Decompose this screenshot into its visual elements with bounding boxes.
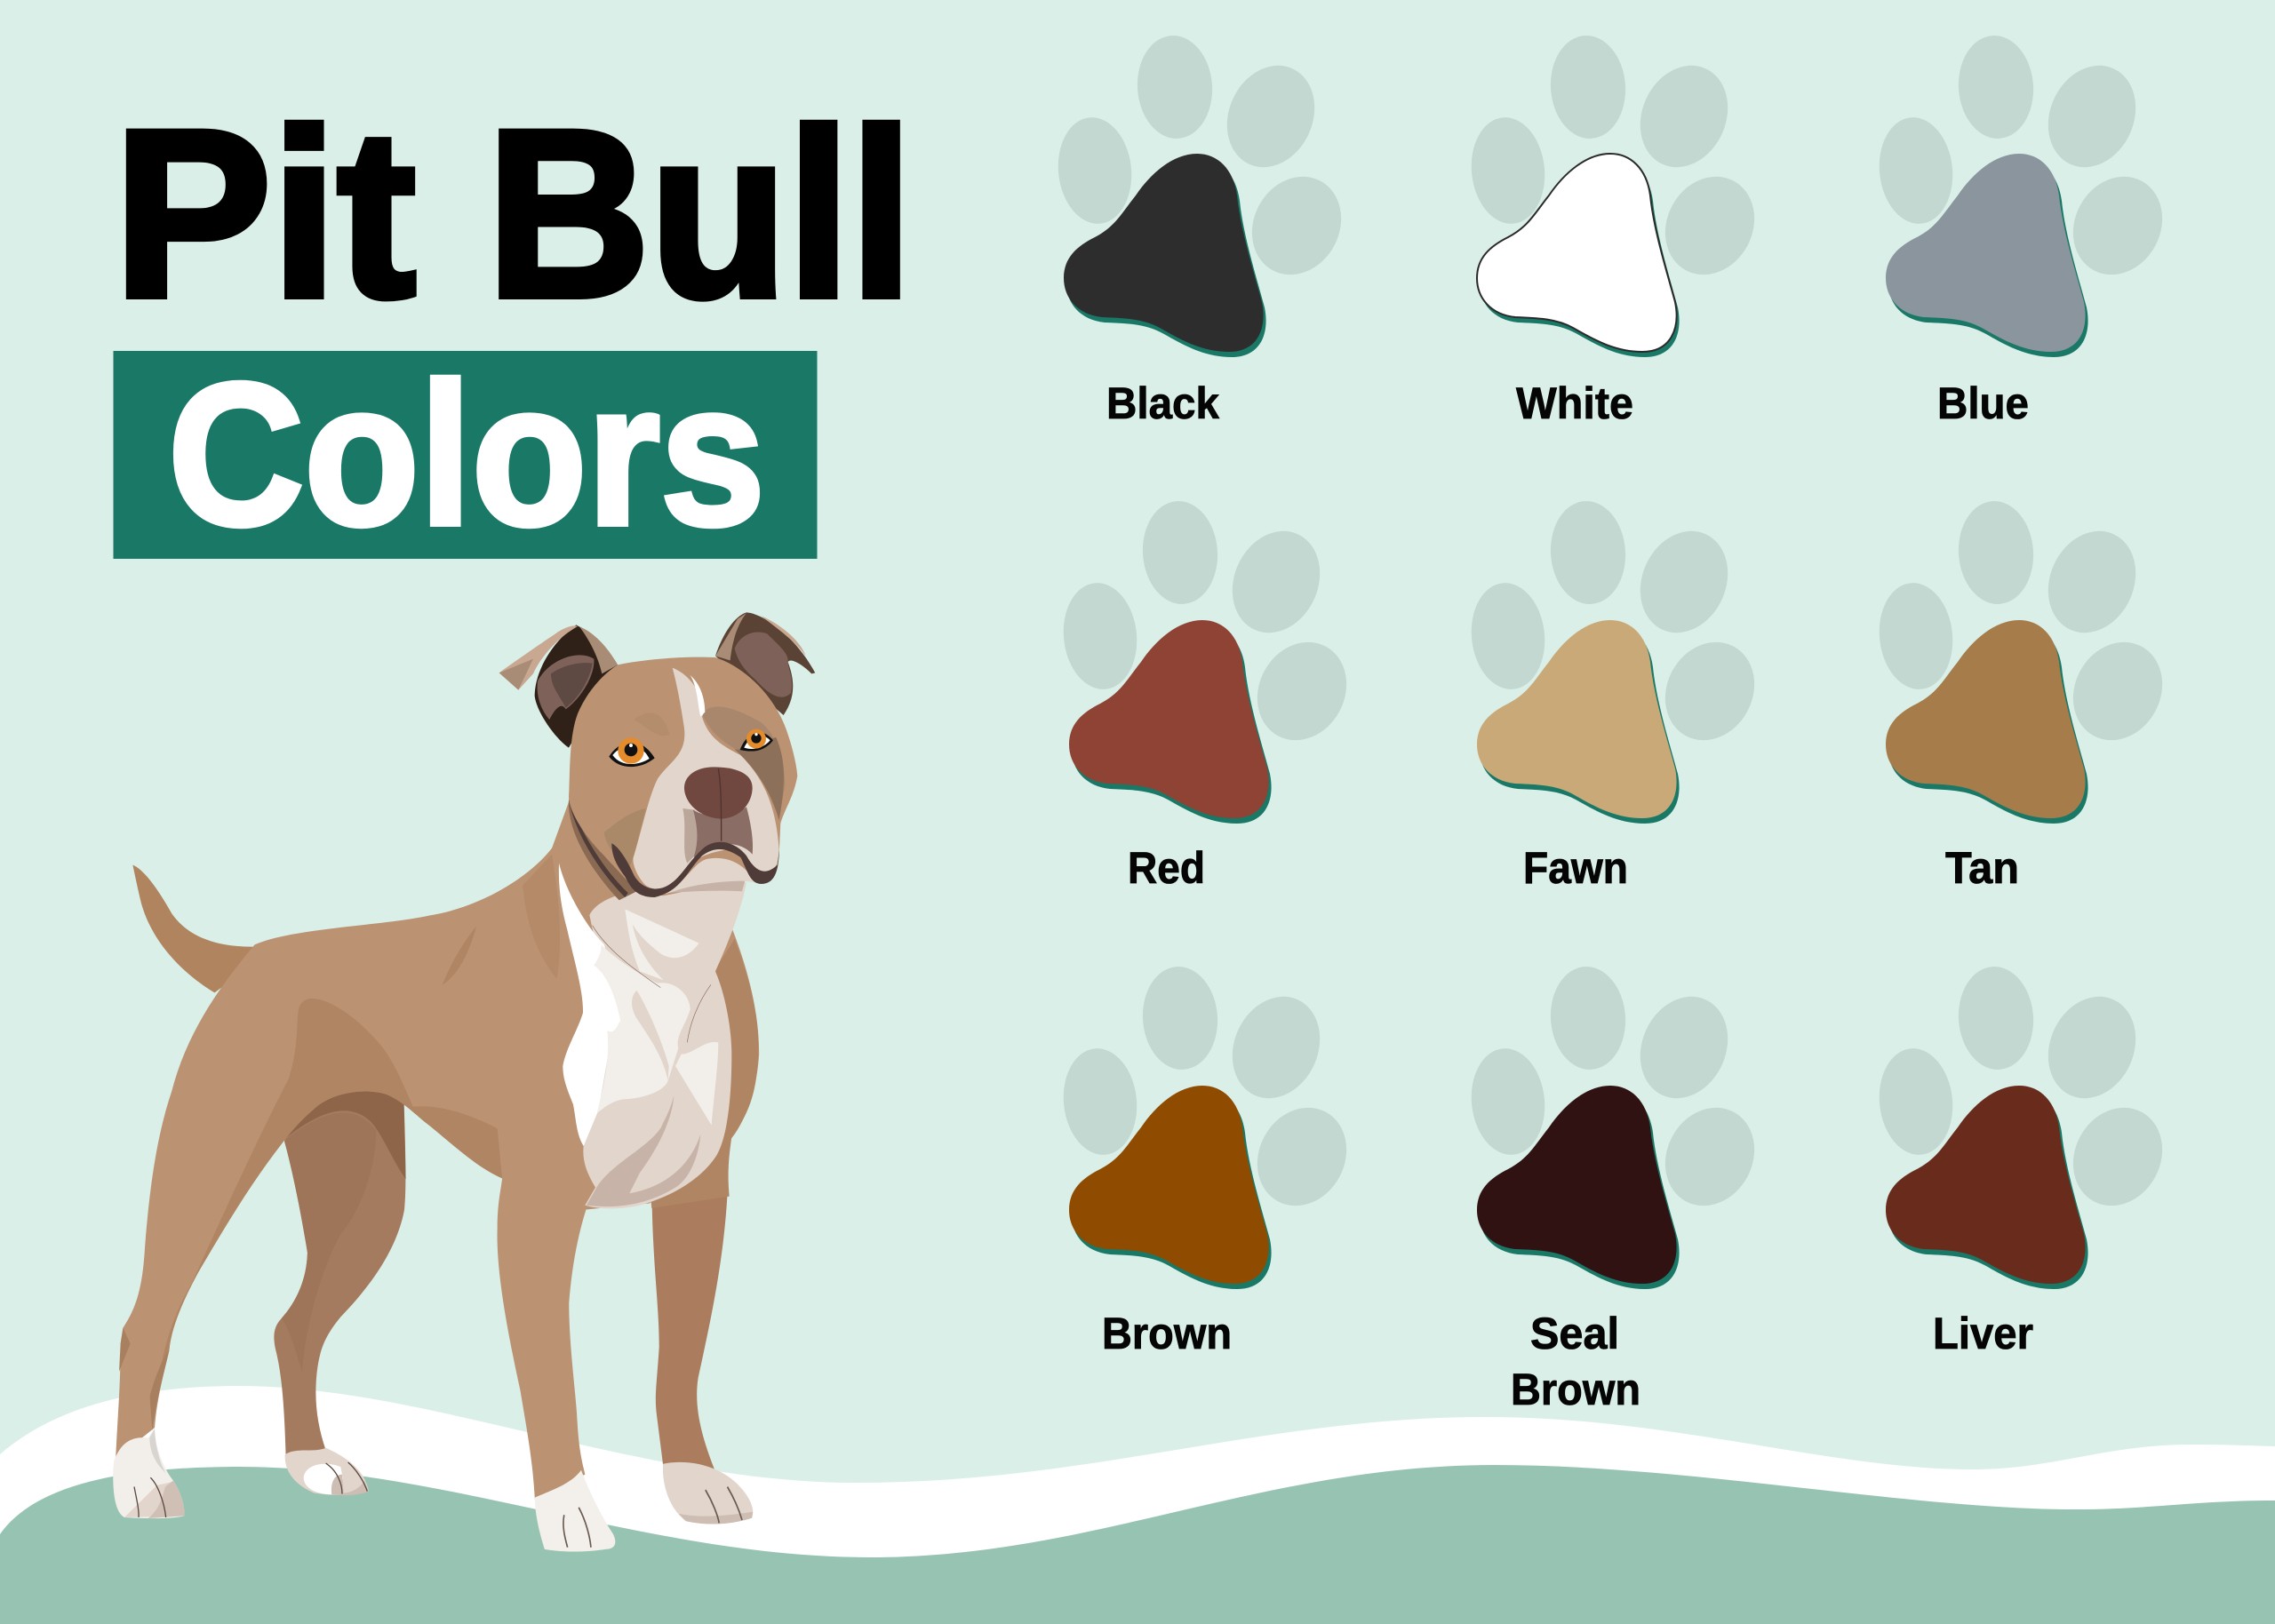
title: Pit Bull (114, 80, 913, 346)
brow and cheek shading (604, 707, 785, 871)
blaze highlight (690, 675, 705, 717)
green ground wave (0, 1465, 2275, 1624)
paw: Red: Red (1128, 843, 1205, 893)
title: Pit Bull: Bull (487, 80, 913, 346)
dog: far front leg (652, 1166, 729, 1471)
right eye (740, 729, 773, 752)
dog: head (499, 612, 815, 900)
dog: rear near paw (113, 1429, 184, 1518)
paw: Seal Brown: Brown (1511, 1365, 1640, 1414)
paw: Tan: Tan (1945, 843, 2019, 893)
paw: Blue: Blue (1937, 378, 2029, 428)
dog illustration (113, 612, 815, 1551)
paw: Red (1058, 498, 1363, 893)
paw: Seal Brown: Seal (1530, 1309, 1619, 1358)
dog: tail (132, 865, 257, 992)
blaze and muzzle (633, 668, 779, 889)
nose (684, 767, 753, 841)
paw: Seal Brown (1466, 964, 1771, 1414)
paw: Black: Black (1106, 378, 1219, 428)
paw: Brown (1058, 964, 1363, 1358)
title: Pit Bull: Pit (114, 80, 416, 346)
skull (569, 657, 797, 896)
dog: far hind leg (274, 1075, 406, 1456)
left ear (499, 625, 618, 748)
paw: Tan (1874, 498, 2179, 893)
paw: Fawn: Fawn (1523, 843, 1628, 893)
banner: Colors: Colors (168, 342, 765, 568)
white wave (0, 1386, 2275, 1624)
snout (682, 807, 753, 864)
right ear (715, 612, 815, 715)
paw: Liver: Liver (1933, 1309, 2033, 1358)
paw: Blue (1874, 33, 2179, 428)
dog: far hind paw (285, 1448, 369, 1495)
paw: Liver (1874, 964, 2179, 1358)
paw: Fawn (1466, 498, 1771, 893)
dog: front near paw (535, 1470, 615, 1551)
neck collar shadow (569, 800, 637, 900)
mouth line (611, 842, 779, 897)
paw: Black (1053, 33, 1358, 428)
paw: Brown: Brown (1102, 1309, 1232, 1358)
dog: chest (559, 864, 758, 1208)
chin (664, 858, 755, 895)
paw: White: White (1516, 378, 1633, 428)
dog: far front paw (663, 1462, 753, 1524)
paw: White (1466, 33, 1771, 428)
left eye (609, 737, 655, 767)
dog: body and near legs (116, 801, 759, 1500)
